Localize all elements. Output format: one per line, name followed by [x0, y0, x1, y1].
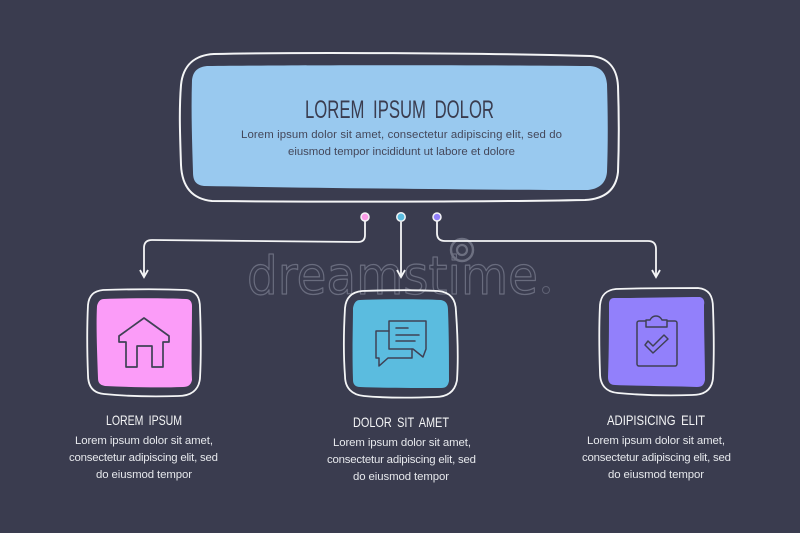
- main card body text: Lorem ipsum dolor sit amet, consectetur adipiscing elit, sed do: [241, 129, 562, 141]
- text: lorem ipsum body: Lorem ipsum dolor sit amet,: [75, 435, 213, 447]
- heading: lorem ipsum: LOREM IPSUM: [106, 412, 182, 428]
- panel: dolor sit amet: [327, 290, 476, 483]
- text: adipisicing elit body: do eiusmod tempor: [608, 469, 704, 481]
- watermark: dreamstime: [247, 246, 538, 307]
- icon frame: purple: [599, 288, 714, 395]
- connector: left arrow: [140, 213, 369, 277]
- text: dolor sit amet body: Lorem ipsum dolor sit amet,: [333, 437, 471, 449]
- text: lorem ipsum body: do eiusmod tempor: [96, 469, 192, 481]
- text: adipisicing elit body: Lorem ipsum dolor sit amet,: [587, 435, 725, 447]
- panel: main heading card: [180, 53, 619, 202]
- main card body text: [241, 129, 562, 158]
- connector: middle arrow: [397, 213, 405, 277]
- icon: speech bubbles: [376, 321, 426, 366]
- cyan square: [353, 299, 449, 388]
- main card body text: eiusmod tempor incididunt ut labore et dolore: [288, 146, 515, 158]
- icon frame: pink: [87, 289, 201, 396]
- panel: adipisicing elit: [582, 288, 731, 481]
- text: adipisicing elit body: [582, 435, 731, 481]
- icon: house: [119, 318, 169, 367]
- heading: adipisicing elit: ADIPISICING ELIT: [607, 412, 705, 428]
- text: dolor sit amet body: [327, 437, 476, 483]
- text: lorem ipsum body: [69, 435, 218, 481]
- text: lorem ipsum body: consectetur adipiscing elit, sed: [69, 452, 218, 464]
- connector: right arrow: [433, 213, 660, 277]
- icon: clipboard: [637, 316, 677, 366]
- main card title: LOREM IPSUM DOLOR: [305, 96, 494, 124]
- main card blue fill: [192, 65, 608, 190]
- text: dolor sit amet body: do eiusmod tempor: [353, 471, 449, 483]
- panel: lorem ipsum: [69, 289, 218, 481]
- main card outer frame: [180, 53, 619, 202]
- heading: dolor sit amet: DOLOR SIT AMET: [353, 414, 449, 430]
- purple square: [608, 297, 705, 387]
- text: adipisicing elit body: consectetur adipiscing elit, sed: [582, 452, 731, 464]
- pink square: [97, 298, 192, 387]
- icon frame: cyan: [344, 290, 458, 398]
- text: dolor sit amet body: consectetur adipiscing elit, sed: [327, 454, 476, 466]
